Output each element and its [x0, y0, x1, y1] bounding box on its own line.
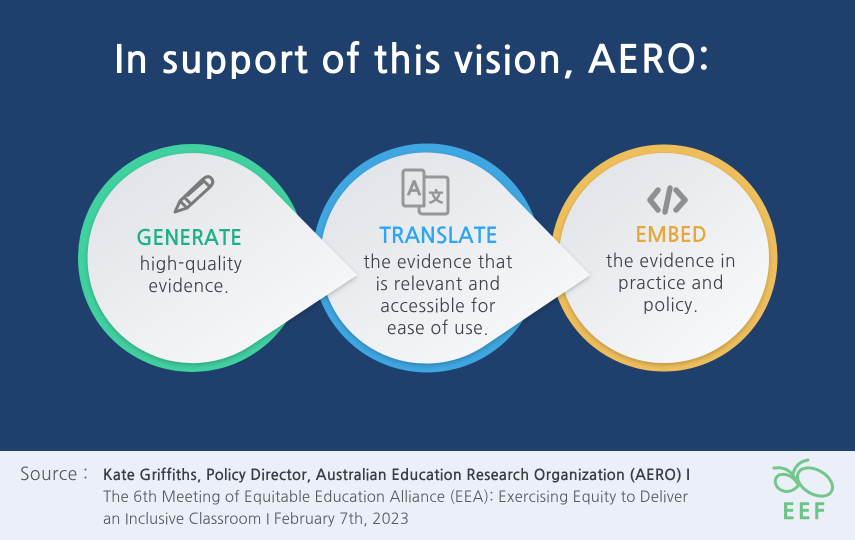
heading: embed: EMBED: [635, 226, 707, 246]
text: translate: ease of use.: [387, 319, 489, 337]
source label: Source :: [20, 465, 89, 483]
icon: pencil: [175, 177, 213, 212]
panel: translate: [312, 144, 590, 372]
text: translate: accessible for: [380, 297, 496, 315]
icon: translate: [403, 170, 448, 214]
icon: translate: 文: [428, 186, 444, 207]
logo: EEF: [774, 460, 837, 523]
icon: translate: A: [407, 179, 421, 198]
logo: EEF: EEF: [782, 501, 828, 523]
text: generate: high-quality: [140, 255, 242, 273]
text: generate: evidence.: [148, 277, 230, 295]
title: In support of this vision, AERO:: [114, 41, 711, 79]
panel: generate: [78, 144, 357, 372]
text: embed: the evidence in: [606, 252, 736, 270]
text: translate: is relevant and: [375, 275, 501, 293]
text: embed: [606, 252, 736, 314]
panel: embed: [550, 144, 778, 372]
source text: an Inclusive Classroom I February 7th, 2023: [103, 512, 409, 527]
source text: The 6th Meeting of Equitable Education Alliance (EEA): Exercising Equity to Deliver: [103, 490, 688, 505]
text: translate: [363, 253, 513, 337]
heading: generate: GENERATE: [136, 229, 242, 249]
text: embed: policy.: [643, 296, 699, 314]
text: embed: practice and: [618, 274, 724, 292]
icon: code brackets: [650, 188, 685, 212]
footer panel: [0, 451, 855, 540]
text: generate: [140, 255, 242, 295]
text: translate: the evidence that: [363, 253, 513, 271]
source text: [103, 466, 690, 527]
source text: Kate Griffiths, Policy Director, Australian Education Research Organization (AERO) I: [103, 466, 690, 483]
heading: translate: TRANSLATE: [379, 226, 498, 247]
